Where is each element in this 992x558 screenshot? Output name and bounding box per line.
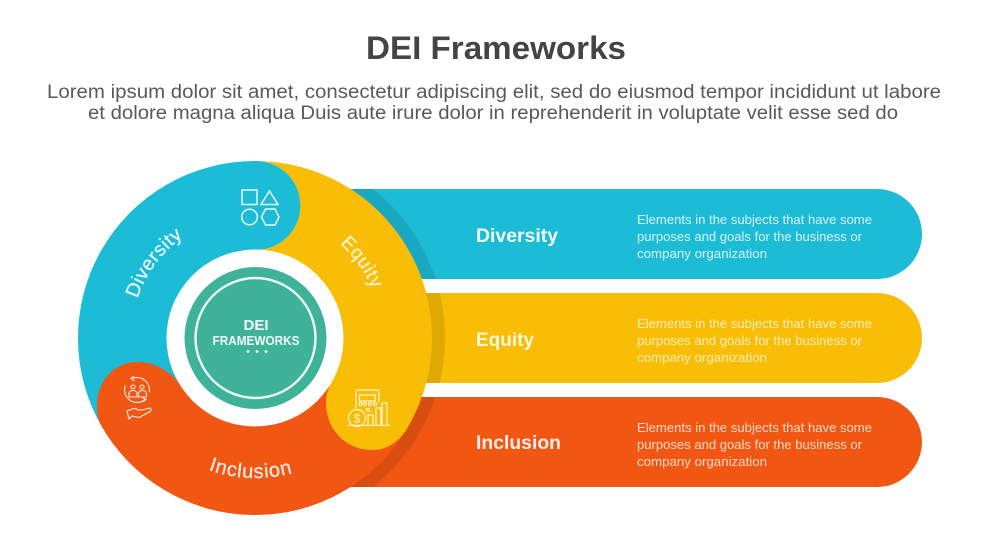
segment: inclusion — [97, 362, 407, 515]
title: DEI Frameworks — [366, 30, 626, 66]
curved label: inclusion: Inclusion — [210, 457, 292, 478]
panel: inclusion bar: purposes and goals for the business or — [637, 438, 862, 452]
panel: inclusion bar: Elements in the subjects that have some — [637, 421, 872, 435]
icon: calculator and chart — [348, 390, 390, 426]
panel: diversity bar — [340, 189, 922, 279]
panel: equity bar: purposes and goals for the business or — [637, 334, 862, 348]
panel: diversity bar: purposes and goals for the business or — [637, 230, 862, 244]
curved label: equity: Equity — [341, 235, 382, 286]
segment: equity — [256, 161, 432, 450]
segment: diversity — [78, 161, 300, 428]
panel: equity bar: Elements in the subjects that have some — [637, 317, 872, 331]
panel: diversity bar: Diversity — [476, 226, 558, 247]
curved label: diversity: Diversity — [125, 228, 180, 298]
icon: shapes — [242, 190, 279, 225]
subtitle text — [47, 82, 941, 124]
panel: equity bar — [340, 293, 922, 383]
panel: circular diagram — [78, 161, 432, 515]
subtitle text: Lorem ipsum dolor sit amet, consectetur adipiscing elit, sed do eiusmod tempor incididunt ut labore — [47, 82, 941, 103]
subtitle text: et dolore magna aliqua Duis aute irure dolor in reprehenderit in voluptate velit esse sed do — [88, 103, 898, 124]
center badge: DEI — [243, 317, 269, 334]
center badge: FRAMEWORKS — [212, 334, 300, 348]
icon: people and hand — [125, 376, 151, 419]
panel: diversity bar: company organization — [637, 247, 767, 261]
panel: diversity bar: Elements in the subjects that have some — [637, 213, 872, 227]
panel: equity bar: Equity — [476, 330, 534, 351]
panel: equity bar: company organization — [637, 351, 767, 365]
panel: inclusion bar: company organization — [637, 455, 767, 469]
circle drop shadow on bars — [351, 189, 445, 487]
center badge — [166, 250, 344, 426]
icon: calculator and chart: $ — [354, 414, 361, 426]
panel: inclusion bar: Inclusion — [476, 433, 561, 454]
panel: inclusion bar — [340, 397, 922, 487]
